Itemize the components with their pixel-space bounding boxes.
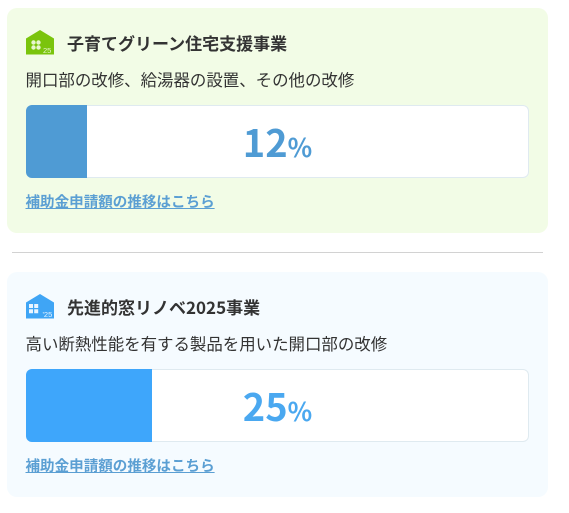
icon: blue house: '25 bbox=[42, 310, 52, 319]
progress bar: 12% bbox=[26, 105, 529, 178]
link: 補助金申請額の推移はこちら bbox=[26, 455, 215, 476]
heading: 先進的窓リノベ2025事業 bbox=[67, 294, 260, 319]
value: 25% bbox=[243, 377, 312, 432]
icon: blue house bbox=[26, 294, 54, 319]
description: 開口部の改修、給湯器の設置、その他の改修 bbox=[26, 67, 354, 91]
icon: green house: 25 bbox=[43, 46, 51, 55]
value: 12% bbox=[243, 113, 312, 168]
progress bar: 25% bbox=[26, 369, 529, 442]
description: 高い断熱性能を有する製品を用いた開口部の改修 bbox=[26, 331, 387, 355]
bar fill bbox=[26, 105, 87, 178]
link: 補助金申請額の推移はこちら bbox=[26, 191, 215, 212]
panel: 先進的窓リノベ2025事業 bbox=[7, 272, 548, 497]
bar fill bbox=[26, 369, 152, 442]
icon: green house bbox=[26, 30, 54, 55]
heading: 子育てグリーン住宅支援事業 bbox=[67, 30, 287, 55]
panel: 子育てグリーン住宅支援事業 bbox=[7, 8, 548, 233]
